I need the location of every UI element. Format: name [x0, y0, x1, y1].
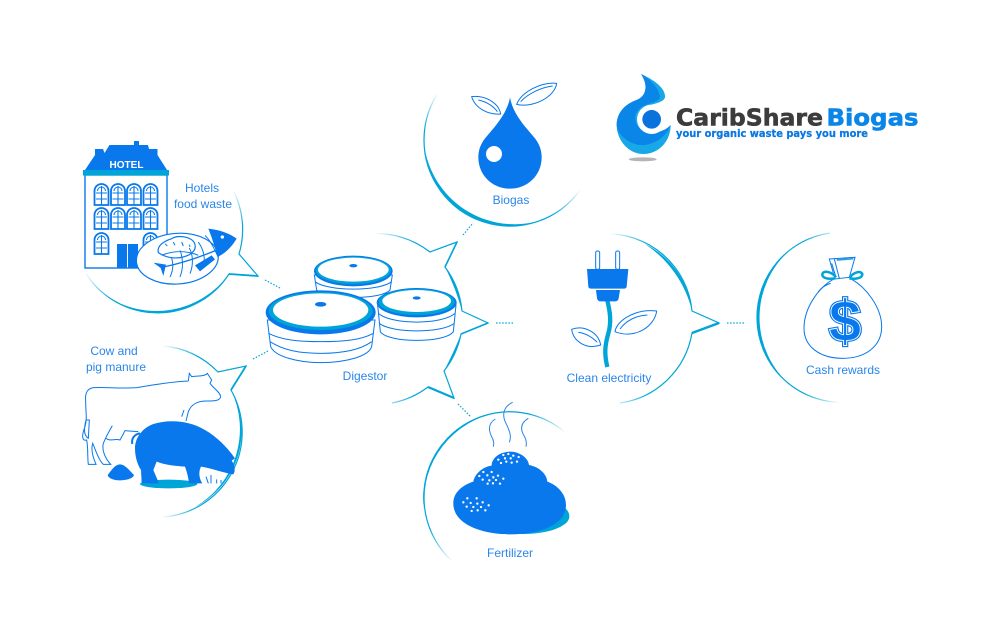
label: cash rewards: Cash rewards [806, 363, 880, 377]
panel: fertilizer [423, 402, 569, 561]
panel: cash rewards [757, 233, 882, 402]
icon: money bag: $ [829, 289, 861, 354]
right tank [377, 288, 457, 340]
back tank [314, 256, 393, 297]
label: cow and pig manure: pig manure [86, 360, 146, 374]
icon: digestor tanks [266, 256, 457, 363]
logo wordmark: CaribShare [676, 104, 823, 132]
connector: hotels to digestor [265, 280, 280, 288]
icon: plate of food with fish [135, 229, 237, 287]
icon: money bag: $ [829, 289, 861, 354]
connector: digestor to fertilizer [458, 404, 471, 417]
panel: clean electricity [567, 234, 719, 403]
label: digestor: Digestor [343, 369, 387, 383]
logo: CaribShare Biogas [617, 74, 918, 161]
bubble outline [602, 234, 719, 403]
label: cow and pig manure [86, 344, 146, 374]
icon: cow outline [83, 373, 221, 464]
front tank [266, 290, 376, 363]
logo wordmark: Biogas [826, 104, 918, 132]
panel: biogas [424, 83, 580, 226]
panel: hotels food waste [83, 141, 258, 313]
logo wordmark [676, 104, 918, 132]
label: hotels food waste: Hotels [185, 181, 219, 195]
speech bubble outline [368, 234, 488, 403]
icon: hotel building [83, 141, 169, 268]
speech bubble outline [85, 190, 258, 313]
label: fertilizer: Fertilizer [487, 546, 533, 560]
logo mark [617, 74, 671, 161]
connector: digestor to electricity [496, 322, 514, 324]
icon: money bag [804, 257, 882, 358]
icon: hotel building: HOTEL [110, 160, 143, 171]
panel: digestor [266, 234, 488, 403]
label: hotels food waste: food waste [174, 197, 232, 211]
icon: biogas drop with leaves [472, 83, 557, 189]
bubble outline [423, 412, 566, 561]
speech bubble outline [162, 346, 246, 517]
icon: plug with leaves [572, 251, 657, 367]
panel: cow and pig manure [83, 344, 246, 517]
icon: pig and manure pile [108, 421, 235, 488]
bubble outline [424, 93, 580, 226]
icon: fertilizer pile with steam [453, 402, 569, 534]
logo tagline: your organic waste pays you more [676, 127, 868, 140]
label: biogas: Biogas [493, 193, 529, 207]
label: cow and pig manure: Cow and [90, 344, 138, 358]
connector: manure to digestor [253, 351, 268, 359]
connector: digestor to biogas [463, 223, 473, 235]
label: clean electricity: Clean electricity [567, 371, 651, 385]
label: hotels food waste [174, 181, 232, 211]
bubble outline [757, 233, 850, 402]
connector: electricity to cash [727, 322, 745, 324]
